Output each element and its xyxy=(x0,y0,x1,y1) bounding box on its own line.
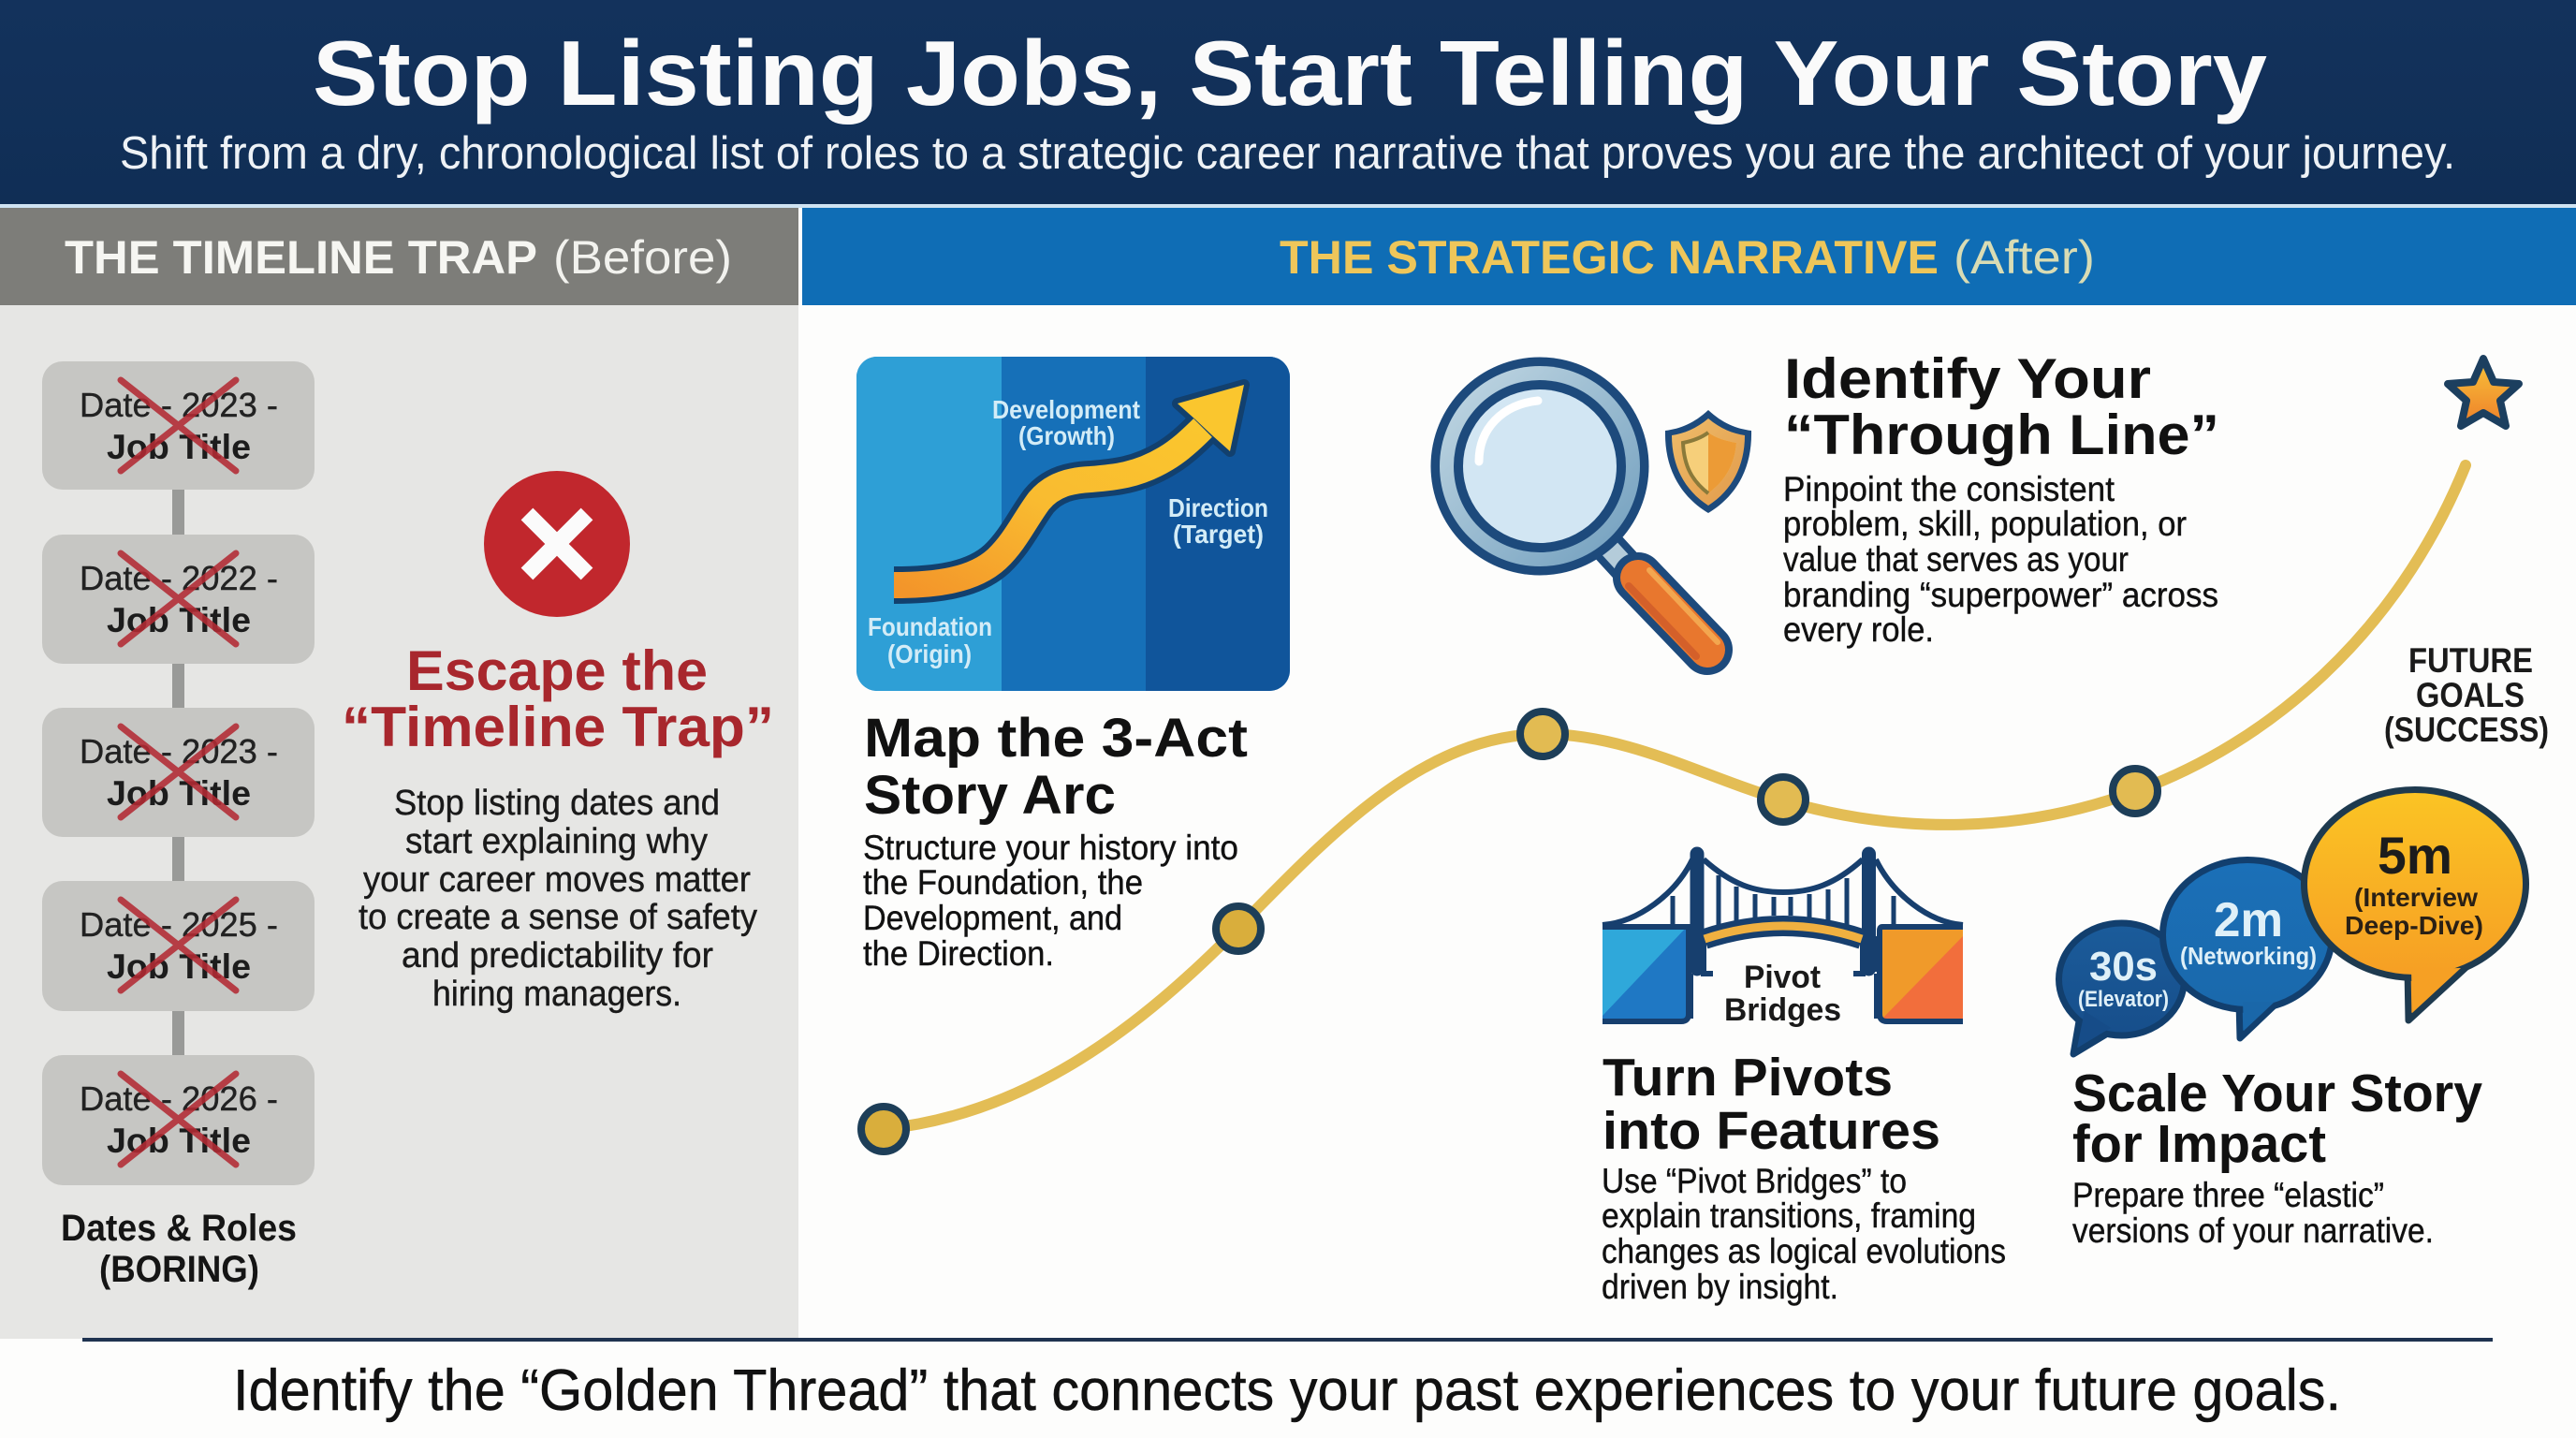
act labels xyxy=(868,395,1268,668)
label: future goals: GOALS xyxy=(2416,676,2525,714)
text block: through line: every role. xyxy=(1783,610,1934,649)
bubble: 2m networking: 2m xyxy=(2214,893,2283,947)
text block: turn pivots: Use “Pivot Bridges” to xyxy=(1602,1162,1907,1200)
icon: star xyxy=(2448,359,2519,426)
text block: map the arc xyxy=(863,829,1238,973)
bubble: 5m interview deep-dive: 5m xyxy=(2378,826,2452,885)
bubble: 2m networking: (Networking) xyxy=(2180,942,2317,970)
subtitle: Shift from a dry, chronological list of roles to a strategic career narrative that proves you are the architect of your journey. xyxy=(120,128,2455,179)
timeline card 4: Date - 2025 - xyxy=(80,905,278,944)
text block: escape explanation: and predictability for xyxy=(402,936,713,976)
bubble: 5m interview deep-dive: (Interview xyxy=(2354,883,2478,912)
bubble: 30s elevator xyxy=(2059,923,2185,1054)
heading: identify your through line: Identify Your xyxy=(1784,347,2151,410)
text block: escape explanation xyxy=(359,784,757,1014)
caption: dates and roles xyxy=(61,1208,297,1290)
text block: scale your story: versions of your narrative. xyxy=(2072,1211,2434,1250)
icon: elastic speech bubbles xyxy=(2059,790,2525,1054)
text block: scale your story xyxy=(2072,1176,2434,1250)
text block: turn pivots: explain transitions, framing xyxy=(1602,1196,1976,1235)
act labels: Development xyxy=(992,395,1140,424)
bridge label: Bridges xyxy=(1724,992,1841,1028)
act labels: (Origin) xyxy=(887,639,972,668)
milestone node 4 xyxy=(1761,777,1806,822)
text block: turn pivots xyxy=(1602,1162,2006,1306)
bridge cables and hangers xyxy=(1603,854,1963,1019)
heading: turn pivots into features: into Features xyxy=(1603,1101,1940,1161)
bubble: 2m networking xyxy=(2162,859,2333,1038)
heading: escape the timeline trap: Escape the xyxy=(406,639,708,702)
panel heading: the strategic narrative (after): (After) xyxy=(1954,231,2095,284)
bubble: 5m interview deep-dive xyxy=(2305,790,2525,1020)
bubble: 5m interview deep-dive: Deep-Dive) xyxy=(2345,911,2483,940)
timeline card 1: Job Title xyxy=(107,428,251,466)
timeline card 4 xyxy=(42,881,315,1011)
timeline card 3: Date - 2023 - xyxy=(80,732,278,770)
text block: scale your story: Prepare three “elastic” xyxy=(2072,1176,2384,1214)
text block: escape explanation: to create a sense of safety xyxy=(359,898,757,937)
heading: map the 3-act story arc: Map the 3-Act xyxy=(864,708,1248,769)
timeline card 2: Date - 2022 - xyxy=(80,559,278,597)
act labels: (Growth) xyxy=(1018,421,1115,450)
icon: magnifying glass xyxy=(1430,358,1718,656)
footer rule xyxy=(82,1338,2493,1342)
illustration: pivot bridge xyxy=(1603,854,1963,1028)
panel heading: timeline trap: THE TIMELINE TRAP xyxy=(65,231,537,284)
milestone node 1 xyxy=(861,1107,906,1152)
right pier block xyxy=(1880,927,1963,1021)
label: future goals: FUTURE xyxy=(2408,641,2533,680)
text block: turn pivots: driven by insight. xyxy=(1602,1268,1838,1306)
text block: through line: problem, skill, population, or xyxy=(1783,505,2187,543)
timeline card 1: Date - 2023 - xyxy=(80,386,278,424)
timeline card 3 xyxy=(42,708,315,837)
timeline card 5 xyxy=(42,1055,315,1185)
heading: identify your through line xyxy=(1784,347,2219,466)
timeline card 4: Job Title xyxy=(107,947,251,986)
text block: map the arc: Development, and xyxy=(863,899,1122,937)
left pier block xyxy=(1603,927,1689,1021)
footer takeaway: Identify the “Golden Thread” that connects your past experiences to your future goals. xyxy=(233,1358,2341,1423)
bridge label: Pivot xyxy=(1744,960,1821,995)
text block: escape explanation: Stop listing dates and xyxy=(394,784,720,823)
text block: turn pivots: changes as logical evolutions xyxy=(1602,1232,2006,1270)
text block: escape explanation: start explaining why xyxy=(405,822,708,861)
title: Stop Listing Jobs, Start Telling Your Story xyxy=(313,22,2267,125)
heading: scale your story for impact: Scale Your Story xyxy=(2072,1064,2482,1123)
arrow xyxy=(894,385,1244,585)
heading: escape the timeline trap: “Timeline Trap” xyxy=(342,696,774,758)
milestone node 5 xyxy=(2113,769,2158,814)
heading: scale your story for impact: for Impact xyxy=(2072,1114,2326,1174)
timeline card 2 xyxy=(42,535,315,664)
heading: map the 3-act story arc xyxy=(864,708,1248,826)
header banner xyxy=(0,0,2576,208)
timeline card 2: Job Title xyxy=(107,601,251,639)
bubble: 30s elevator: (Elevator) xyxy=(2078,987,2169,1012)
milestone node 2 xyxy=(1216,906,1261,951)
text block: through line: Pinpoint the consistent xyxy=(1783,470,2115,508)
act labels: (Target) xyxy=(1173,520,1264,549)
timeline card 3: Job Title xyxy=(107,774,251,813)
heading: escape the timeline trap xyxy=(342,639,774,758)
act labels: Direction xyxy=(1168,493,1268,522)
panel heading: timeline trap xyxy=(65,231,732,284)
caption: dates and roles: (BORING) xyxy=(99,1249,259,1290)
text block: escape explanation: hiring managers. xyxy=(432,975,681,1014)
milestone node 3 xyxy=(1520,712,1565,756)
label: future goals: (SUCCESS) xyxy=(2384,711,2549,749)
icon: shield xyxy=(1665,410,1751,513)
timeline card 5: Job Title xyxy=(107,1122,251,1160)
timeline card 5: Date - 2026 - xyxy=(80,1079,278,1118)
text block: through line: value that serves as your xyxy=(1783,540,2129,579)
panel heading: timeline trap: (Before) xyxy=(553,231,732,284)
heading: turn pivots into features xyxy=(1603,1048,1940,1161)
bubble: 30s elevator: 30s xyxy=(2089,944,2158,990)
heading: identify your through line: “Through Line” xyxy=(1784,404,2219,466)
timeline card 1 xyxy=(42,361,315,490)
text block: through line xyxy=(1783,470,2218,649)
text block: map the arc: Structure your history into xyxy=(863,829,1238,867)
timeline connectors xyxy=(172,487,184,1057)
text block: map the arc: the Direction. xyxy=(863,934,1054,973)
text block: escape explanation: your career moves matter xyxy=(363,860,751,900)
bridge label xyxy=(1724,960,1841,1028)
text block: map the arc: the Foundation, the xyxy=(863,863,1143,902)
heading: turn pivots into features: Turn Pivots xyxy=(1603,1048,1893,1108)
icon: red X circle xyxy=(484,471,630,617)
heading: map the 3-act story arc: Story Arc xyxy=(864,765,1116,826)
act labels: Foundation xyxy=(868,612,992,641)
panel heading: the strategic narrative (after) xyxy=(802,208,2576,305)
label: future goals xyxy=(2384,641,2549,749)
illustration: 3-act story arc xyxy=(856,357,1290,691)
panel heading: the strategic narrative (after): THE STRATEGIC NARRATIVE xyxy=(1280,231,1939,284)
caption: dates and roles: Dates & Roles xyxy=(61,1208,297,1249)
panel: the timeline trap (before) xyxy=(0,208,798,1339)
text block: through line: branding “superpower” across xyxy=(1783,576,2218,614)
bridge deck arch xyxy=(1705,926,1862,939)
chart: golden thread curve xyxy=(861,465,2466,1152)
heading: scale your story for impact xyxy=(2072,1064,2482,1174)
